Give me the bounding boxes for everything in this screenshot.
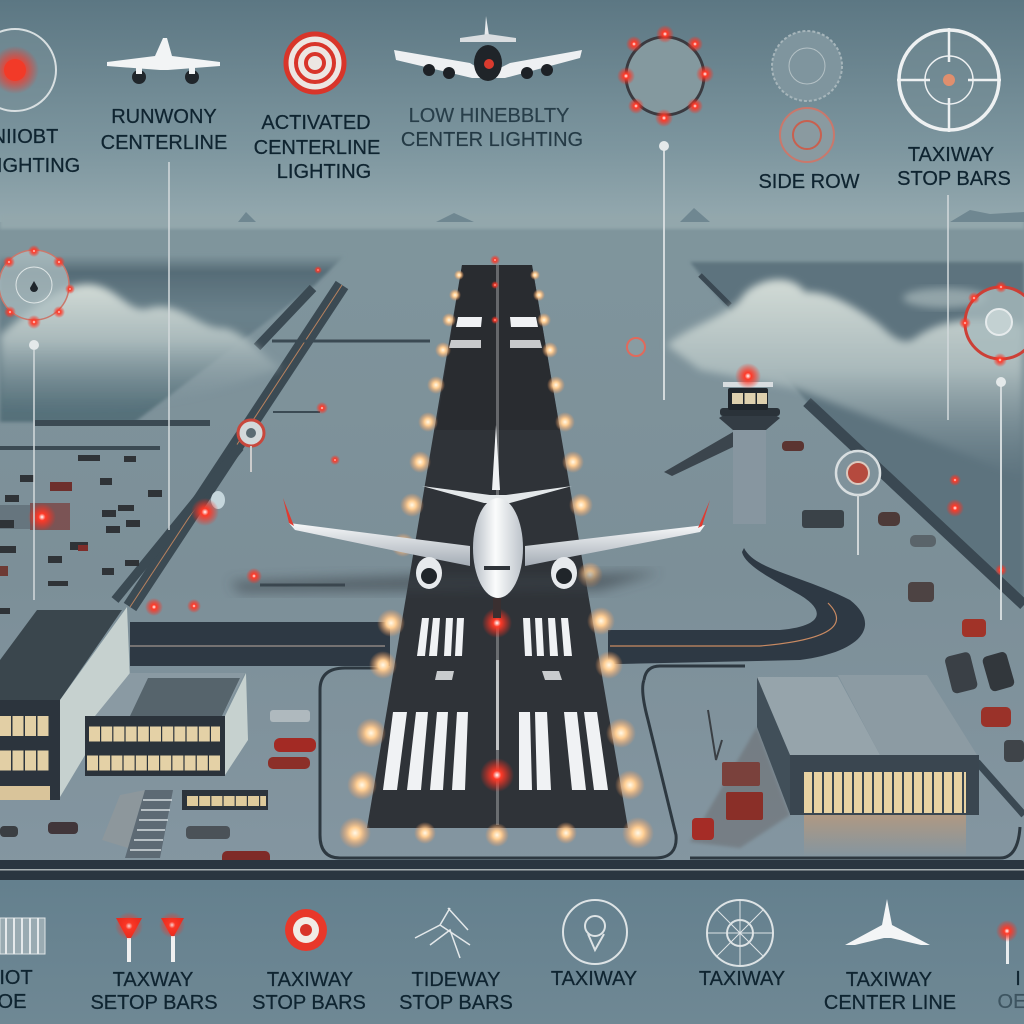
heading: low visibility center lighting: CENTER LIGHTING <box>401 129 583 151</box>
heading: low visibility center lighting <box>401 105 583 151</box>
plane shadow <box>230 572 660 592</box>
airplane <box>283 425 710 618</box>
cross taxiway <box>130 622 390 666</box>
bottom text: fragment right: I <box>1015 968 1021 990</box>
top icon: dark airliner <box>394 16 582 81</box>
bottom text: taxiway stop bars 1: TAXIWAY <box>267 969 353 991</box>
bottom icon: line sketch <box>415 908 470 958</box>
bottom text: taxiway stop bars 1 <box>252 969 366 1014</box>
heading: activated centerline lighting: CENTERLINE <box>254 137 380 159</box>
heading: runway centerline: RUNWONY <box>111 106 217 128</box>
apron vehicles left <box>0 710 316 867</box>
heading: side row: SIDE ROW <box>758 171 860 193</box>
far left fog field <box>0 255 345 422</box>
heading: pilot lighting <box>0 126 80 177</box>
curved taxiway <box>608 548 865 664</box>
taxiway right <box>700 275 1024 815</box>
right parking vehicles <box>782 441 1024 762</box>
heading: low visibility center lighting: LOW HINEBBLTY <box>409 105 569 127</box>
hangar apron vehicles <box>692 710 763 840</box>
bottom text: taxiway centerline <box>824 969 956 1014</box>
top icon: red spiral <box>285 33 345 93</box>
heading: activated centerline lighting: LIGHTING <box>277 161 371 183</box>
bottom icon: twin red markers <box>115 912 185 962</box>
distant fog bank <box>0 208 1024 272</box>
bottom icon: white plane <box>845 899 930 945</box>
bottom text: taxiway stop bars 1: STOP BARS <box>252 992 366 1014</box>
top icon: red ring <box>617 25 714 127</box>
bottom icon: pin circle <box>563 900 627 964</box>
wings <box>289 523 470 566</box>
bottom text: tideway stop bars <box>399 969 513 1014</box>
taxiway lines left <box>0 285 430 607</box>
control tower <box>664 363 780 524</box>
apron outlines <box>320 666 1020 858</box>
top icon: faint rings <box>772 31 842 162</box>
top icon: crosshair <box>897 28 1001 132</box>
heading: activated centerline lighting: ACTIVATED <box>261 112 371 134</box>
bottom legend band <box>0 860 1024 1024</box>
top icon: plane white <box>107 38 220 84</box>
bottom text: taxiway setop bars: TAXWAY <box>113 969 193 991</box>
terminal building <box>0 607 268 858</box>
runway edge lights <box>339 255 654 849</box>
heading: activated centerline lighting <box>254 112 380 183</box>
tail <box>492 425 500 490</box>
engines <box>416 557 442 589</box>
bottom icon: striped panel <box>0 918 45 954</box>
bottom text: taxiway setop bars <box>90 969 218 1014</box>
bottom text: pilot fragment <box>0 967 33 1013</box>
heading: runway centerline: CENTERLINE <box>101 132 227 154</box>
bottom text: tideway stop bars: TIDEWAY <box>412 969 500 991</box>
fuselage <box>473 498 523 598</box>
heading: runway centerline <box>101 106 227 154</box>
bottom text: taxiway setop bars: SETOP BARS <box>90 992 218 1014</box>
bottom icon: target <box>707 900 773 966</box>
left parking lot <box>0 455 162 614</box>
fog cloud right <box>667 280 1024 480</box>
bottom text: taxiway centerline: TAXIWAY <box>846 969 932 991</box>
side icon left <box>0 245 75 329</box>
bottom icon: single marker <box>996 920 1018 964</box>
far right fog field <box>690 262 1024 600</box>
callout leader lines <box>34 150 1001 620</box>
heading: taxiway stop bars top: STOP BARS <box>897 168 1011 190</box>
airfield ground <box>0 270 1024 880</box>
background sky <box>0 0 1024 270</box>
terminal stairs <box>102 790 145 848</box>
top icon: pilot lighting <box>0 29 56 111</box>
hangar <box>757 675 979 857</box>
side icon right <box>959 281 1024 367</box>
bottom text: taxiway: TAXIWAY <box>551 968 637 990</box>
bottom text: tideway stop bars: STOP BARS <box>399 992 513 1014</box>
bottom text: taxiway 2: TAXIWAY <box>699 968 785 990</box>
bottom text: pilot fragment: IOT <box>0 967 33 989</box>
runway <box>367 265 628 828</box>
bottom text: taxiway centerline: CENTER LINE <box>824 992 956 1014</box>
bottom text: fragment right <box>998 968 1024 1013</box>
mid-field markers <box>28 266 1007 616</box>
heading: taxiway stop bars top <box>897 144 1011 190</box>
heading: taxiway stop bars top: TAXIWAY <box>908 144 994 166</box>
runway threshold markings <box>383 317 608 790</box>
bottom icon: red circle <box>285 909 327 951</box>
curved taxiway centre line <box>610 603 837 646</box>
hangar shadow <box>690 727 790 848</box>
fog cloud left <box>0 284 282 410</box>
fog wisp right <box>903 288 987 308</box>
terminal lower wing <box>95 673 245 716</box>
